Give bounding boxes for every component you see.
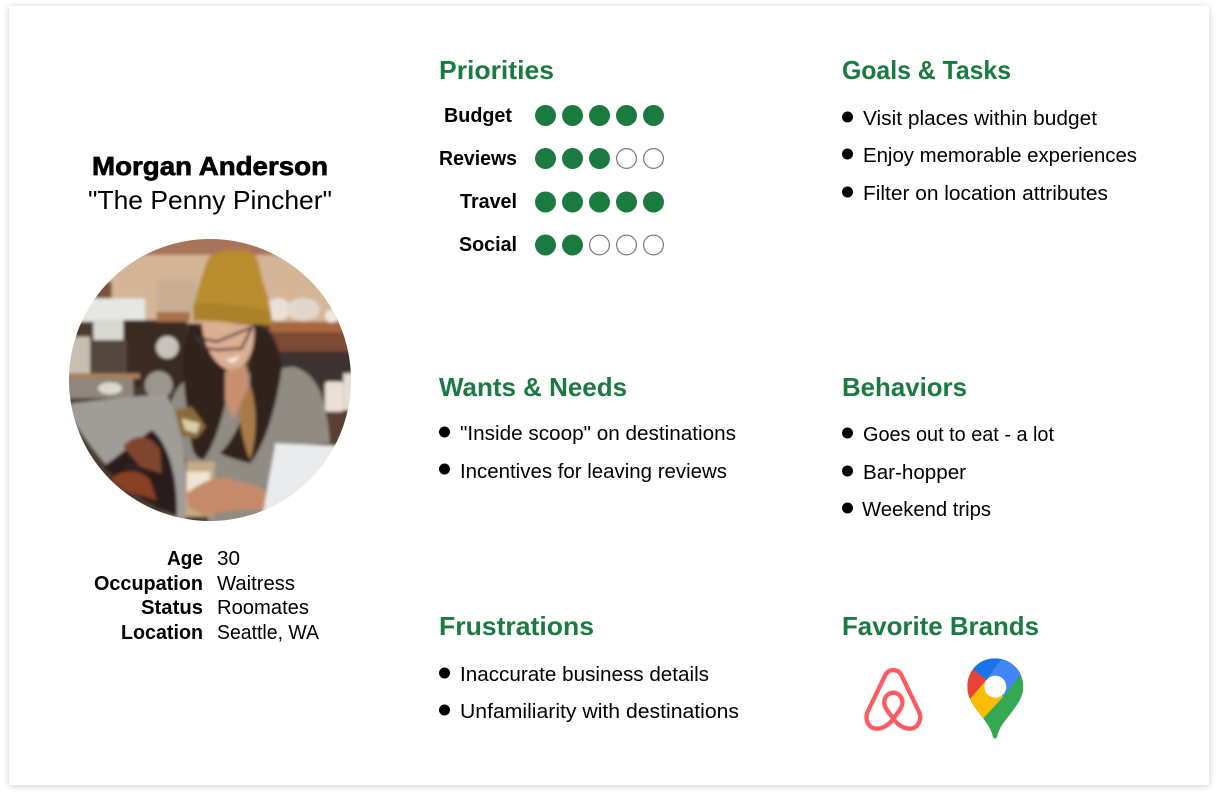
demographic details (94, 548, 320, 644)
heading: favorite brands: Favorite Brands (842, 611, 1039, 641)
panel: behaviors (842, 372, 1054, 521)
goals list: Filter on location attributes (863, 183, 1108, 205)
panel: wants and needs (439, 372, 736, 483)
demographic details: Occupation (94, 573, 203, 595)
demographic details: Roomates (217, 597, 309, 619)
icon: airbnb logo (866, 670, 920, 729)
rating: reviews (439, 148, 663, 170)
rating: social: Social (459, 234, 517, 256)
demographic details: Seattle, WA (217, 622, 320, 644)
heading: behaviors: Behaviors (842, 372, 967, 402)
behaviors list: Weekend trips (862, 499, 991, 521)
demographic details: Location (121, 622, 203, 644)
heading: wants and needs: Wants & Needs (439, 372, 627, 402)
rating: travel (460, 191, 664, 213)
heading: priorities: Priorities (439, 55, 554, 85)
heading: goals and tasks: Goals & Tasks (842, 55, 1011, 85)
persona nickname: "The Penny Pincher" (88, 185, 332, 215)
frustrations list: Inaccurate business details (460, 664, 709, 686)
behaviors list: Goes out to eat - a lot (863, 424, 1054, 446)
heading: frustrations: Frustrations (439, 611, 594, 641)
persona content (69, 60, 1136, 738)
panel: goals and tasks (842, 55, 1137, 205)
behaviors list: Bar-hopper (863, 462, 966, 484)
panel: profile (60, 151, 360, 644)
persona name: Morgan Anderson (92, 151, 328, 181)
goals list: Enjoy memorable experiences (863, 145, 1137, 167)
goals list (842, 108, 1137, 205)
wants list: "Inside scoop" on destinations (460, 423, 736, 445)
frustrations list (439, 664, 739, 723)
panel: frustrations (439, 611, 739, 723)
demographic details: Status (141, 597, 203, 619)
icon: google maps pin (967, 658, 1024, 738)
panel: favorite brands (842, 611, 1039, 743)
frustrations list: Unfamiliarity with destinations (460, 701, 739, 723)
wants list (439, 423, 736, 483)
rating: budget: Budget (444, 105, 512, 127)
rating: social (459, 234, 663, 256)
goals list: Visit places within budget (863, 108, 1097, 130)
rating: budget (444, 105, 664, 127)
rating: travel: Travel (460, 191, 517, 213)
wants list: Incentives for leaving reviews (460, 461, 727, 483)
portrait photo (69, 239, 351, 521)
demographic details: Age (167, 548, 203, 570)
behaviors list (842, 424, 1054, 521)
demographic details: 30 (217, 548, 240, 570)
rating: reviews: Reviews (439, 148, 517, 170)
demographic details: Waitress (217, 573, 295, 595)
panel: priorities (439, 55, 664, 256)
